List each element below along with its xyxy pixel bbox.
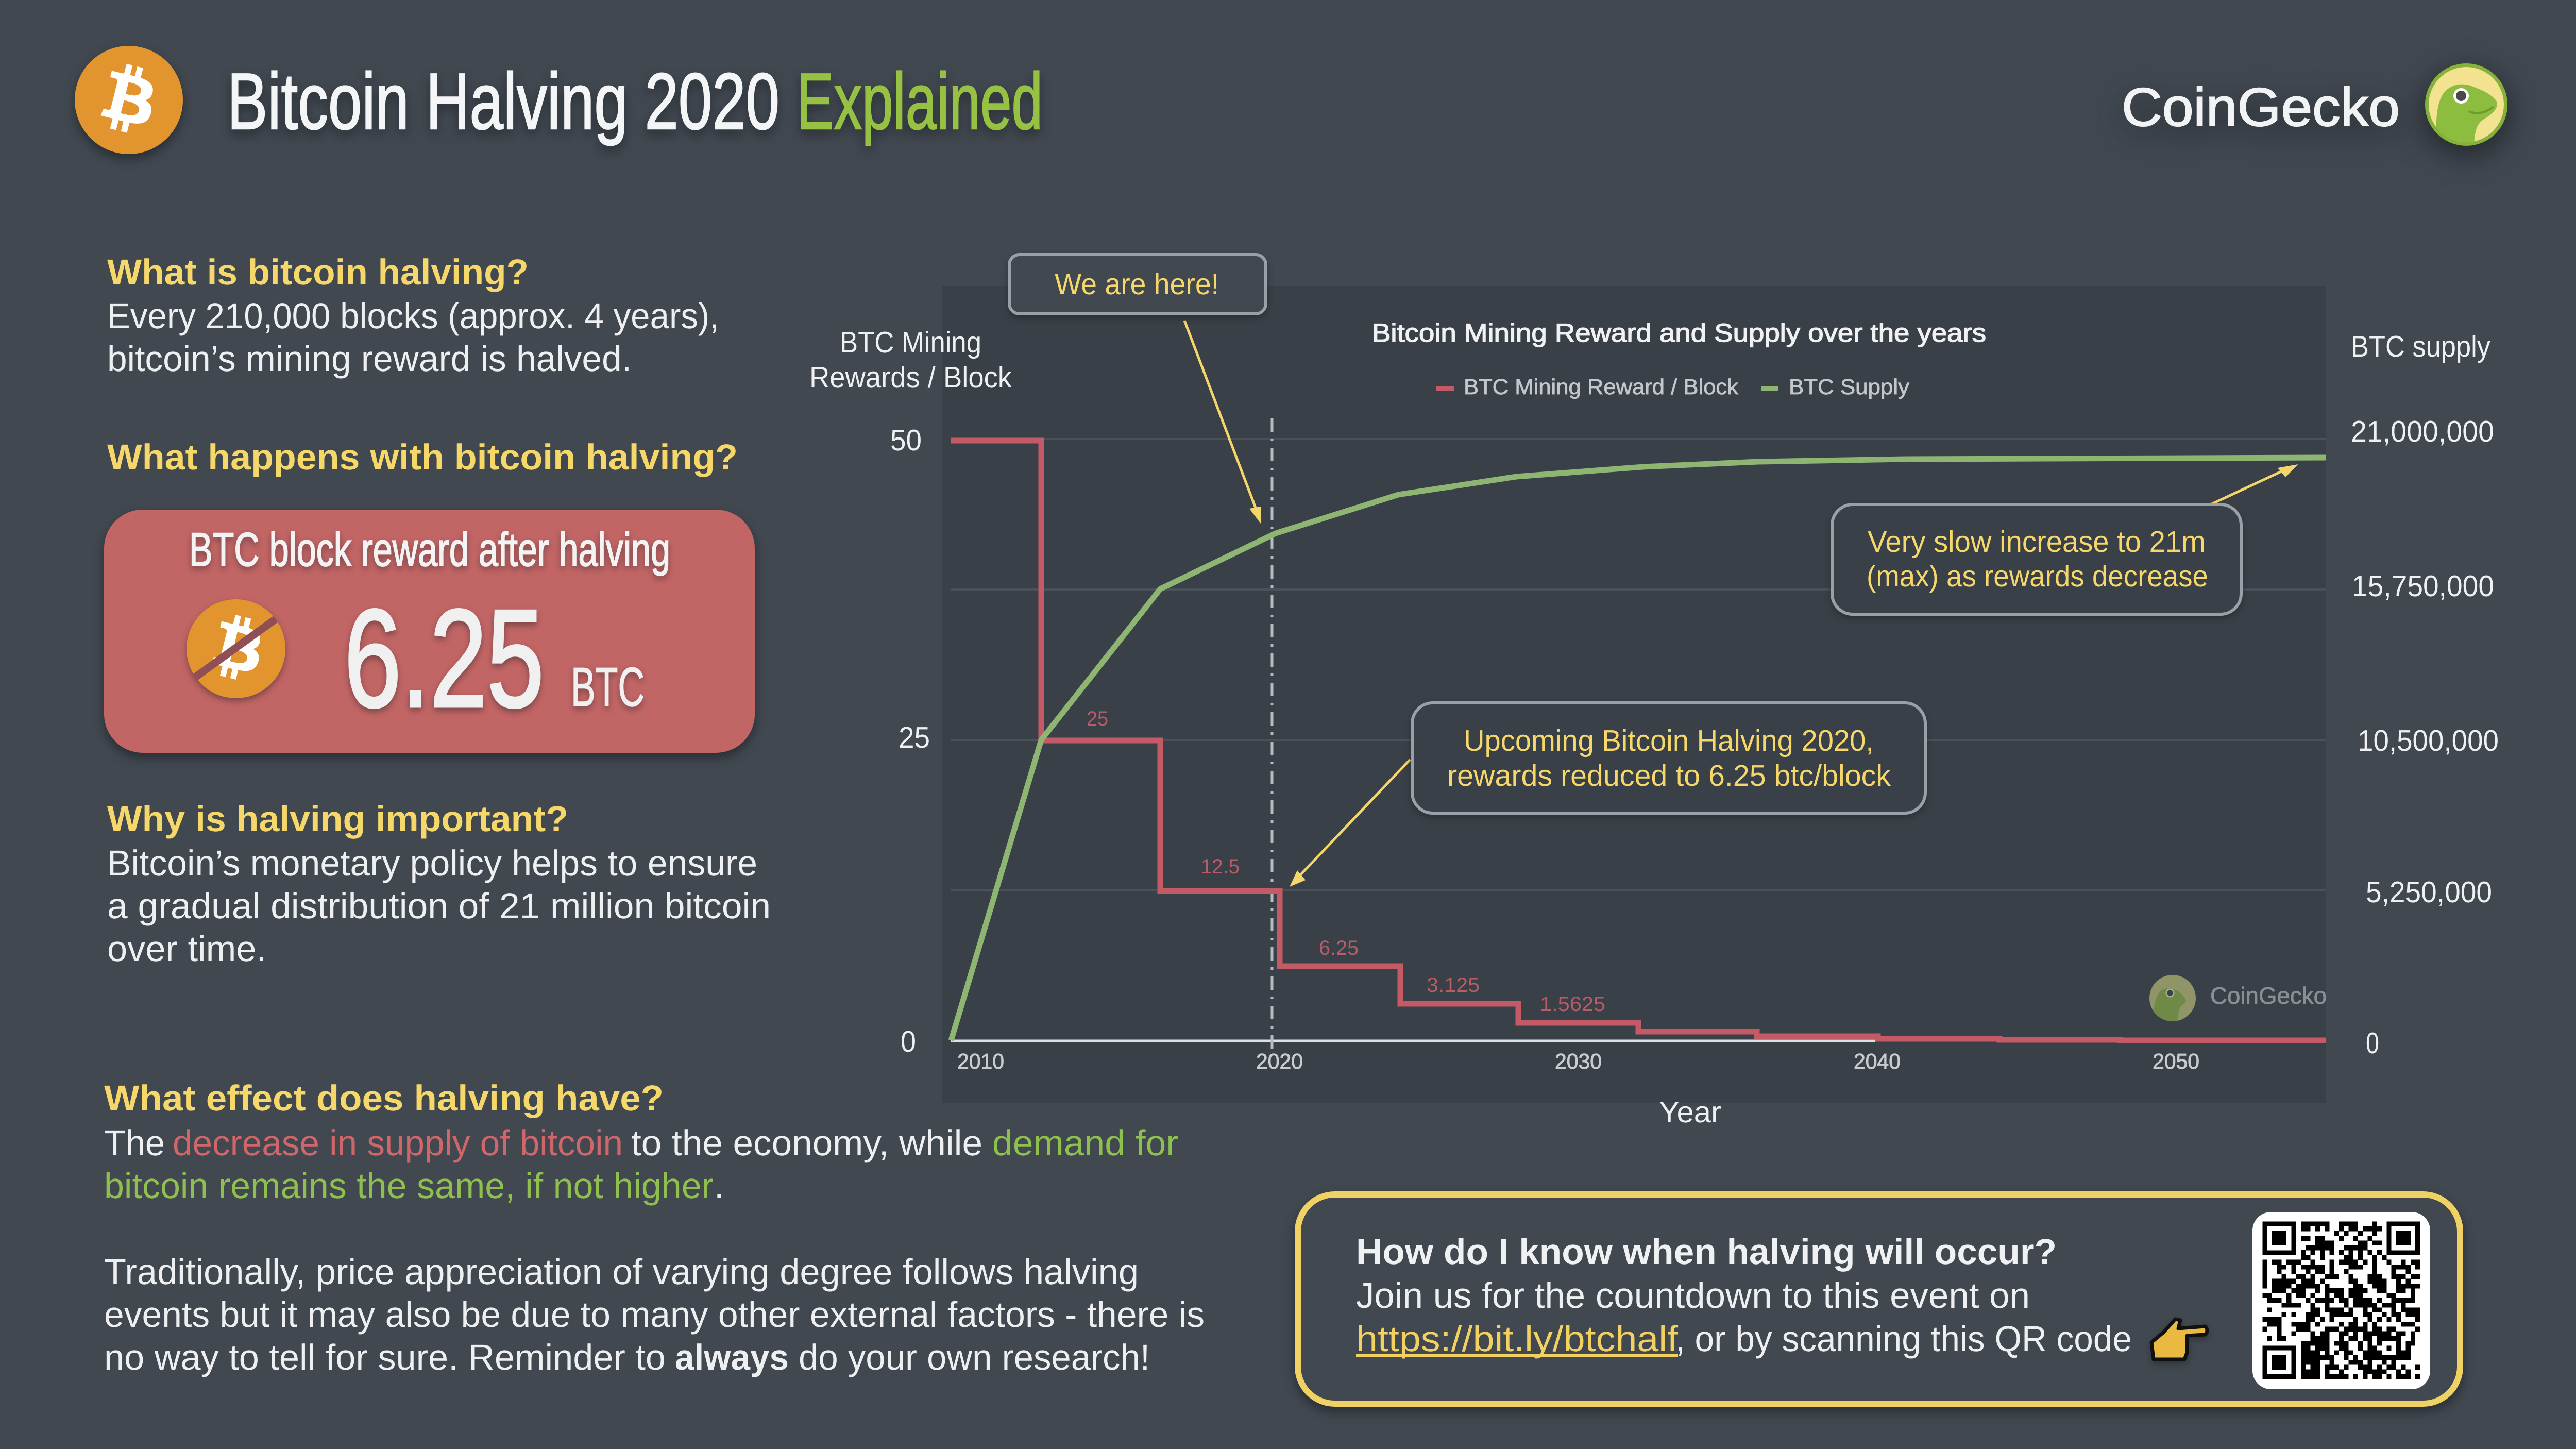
right axis labels [2351, 415, 2499, 1060]
effect paragraph: to the economy, while [631, 1123, 982, 1163]
price appreciation paragraph: no way to tell for sure. Reminder to [104, 1337, 666, 1377]
legend [1436, 375, 1909, 399]
effect paragraph: . [714, 1166, 724, 1206]
panel text [1356, 1275, 2132, 1359]
effect paragraph: bitcoin remains the same, if not higher [104, 1166, 714, 1206]
reward data labels: 1.5625 [1540, 993, 1605, 1016]
green line: BTC supply [951, 458, 2326, 1040]
body lines: Bitcoin’s monetary policy helps to ensure [107, 843, 757, 883]
right axis labels: 10,500,000 [2358, 724, 2499, 757]
icon: bitcoin logo [75, 46, 183, 154]
body lines: a gradual distribution of 21 million bitcoin [107, 886, 771, 926]
chart watermark [2149, 975, 2327, 1025]
price appreciation paragraph: Traditionally, price appreciation of varying degree follows halving [104, 1252, 1139, 1292]
right axis labels: 21,000,000 [2351, 415, 2494, 448]
body lines: Every 210,000 blocks (approx. 4 years), [107, 296, 719, 336]
panel text: Join us for the countdown to this event on [1356, 1275, 2030, 1316]
reward panel heading: BTC block reward after halving [189, 524, 670, 576]
axis title: BTC mining rewards: BTC Mining [840, 326, 981, 359]
2020 marker line [1270, 418, 1274, 1049]
x axis labels: 2010 [957, 1049, 1004, 1073]
body lines [107, 843, 771, 969]
arrow: upcoming halving [1290, 760, 1410, 887]
body lines: over time. [107, 929, 266, 969]
title accent word: Explained [796, 57, 1043, 146]
price appreciation paragraph: do your own research! [799, 1337, 1150, 1377]
effect paragraph: decrease in supply of bitcoin [173, 1123, 623, 1163]
x axis labels: 2040 [1854, 1049, 1901, 1073]
price appreciation paragraph [104, 1252, 1205, 1377]
callout: upcoming halving: rewards reduced to 6.25 btc/block [1447, 759, 1891, 793]
callout: upcoming halving [1412, 703, 1925, 813]
reward data labels: 12.5 [1201, 855, 1240, 878]
text block: what is bitcoin halving: What is bitcoin halving? [107, 252, 529, 292]
reward data labels [1087, 707, 1605, 1016]
axis title: BTC mining rewards [809, 326, 1012, 394]
reward data labels: 6.25 [1319, 937, 1359, 959]
left axis labels: 25 [899, 721, 930, 754]
left axis labels: 50 [890, 424, 922, 457]
right axis labels: 0 [2366, 1026, 2379, 1060]
effect paragraph: The [104, 1123, 165, 1163]
callout: slow increase to 21m [1832, 504, 2241, 614]
price appreciation paragraph: events but it may also be due to many other external factors - there is [104, 1294, 1205, 1335]
QR code [2252, 1212, 2430, 1389]
text block: what effect does halving have: What effect does halving have? [104, 1078, 664, 1118]
panel: BTC block reward [104, 510, 755, 753]
left axis labels: 0 [901, 1025, 916, 1058]
callout: upcoming halving: Upcoming Bitcoin Halving 2020, [1464, 724, 1874, 757]
right axis labels: 5,250,000 [2366, 875, 2492, 909]
x axis labels: 2020 [1256, 1049, 1303, 1073]
x axis line [951, 1040, 1875, 1042]
panel text: https://bit.ly/btchalf [1356, 1319, 1679, 1359]
text block: what is bitcoin halving [107, 252, 719, 379]
red line: mining reward [951, 441, 2326, 1040]
body lines [107, 296, 719, 379]
text block: what effect does halving have [104, 1078, 1205, 1377]
legend: BTC Supply [1789, 375, 1909, 399]
text block: why is halving important [107, 799, 771, 969]
reward value: 6.25 [344, 581, 544, 736]
callout: slow increase to 21m: (max) as rewards decrease [1867, 560, 2208, 593]
callout: we are here [1009, 255, 1266, 314]
reward data labels: 3.125 [1427, 974, 1480, 997]
axis title: BTC mining rewards: Rewards / Block [809, 361, 1012, 394]
legend: BTC Mining Reward / Block [1464, 375, 1739, 399]
heading: what happens with bitcoin halving: What happens with bitcoin halving? [107, 437, 738, 477]
effect paragraph: demand for [992, 1123, 1178, 1163]
x axis labels: 2030 [1555, 1049, 1602, 1073]
x axis title: Year [1659, 1096, 1721, 1129]
icon: pointing hand [2151, 1319, 2207, 1359]
x axis labels [957, 1049, 2199, 1073]
axis title: BTC supply: BTC supply [2351, 330, 2490, 363]
arrow: slow increase [2212, 464, 2298, 504]
callout: we are here: We are here! [1055, 267, 1219, 301]
right axis labels: 15,750,000 [2352, 569, 2494, 603]
panel text: , or by scanning this QR code [1675, 1319, 2132, 1359]
effect paragraph [104, 1123, 1178, 1206]
x axis labels: 2050 [2153, 1049, 2199, 1073]
panel: chart background [942, 286, 2326, 1103]
arrow: we are here [1184, 321, 1261, 524]
logo: CoinGecko wordmark: CoinGecko [2122, 77, 2400, 138]
body lines: bitcoin’s mining reward is halved. [107, 339, 632, 379]
icon: CoinGecko gecko [2425, 63, 2507, 149]
title: Bitcoin Halving 2020 [227, 57, 779, 146]
reward unit: BTC [571, 656, 645, 718]
left axis labels [890, 424, 930, 1058]
chart title: Bitcoin Mining Reward and Supply over the years [1372, 318, 1986, 347]
reward data labels: 25 [1087, 707, 1108, 730]
chart: bitcoin mining reward and supply [890, 318, 2499, 1129]
chart watermark: CoinGecko [2210, 982, 2327, 1009]
icon: halved bitcoin [187, 599, 285, 698]
price appreciation paragraph: always [675, 1337, 789, 1377]
panel heading: How do I know when halving will occur? [1356, 1232, 2057, 1272]
panel: how do I know [1298, 1194, 2460, 1404]
callout: slow increase to 21m: Very slow increase to 21m [1868, 525, 2206, 559]
text block: why is halving important: Why is halving important? [107, 799, 568, 839]
